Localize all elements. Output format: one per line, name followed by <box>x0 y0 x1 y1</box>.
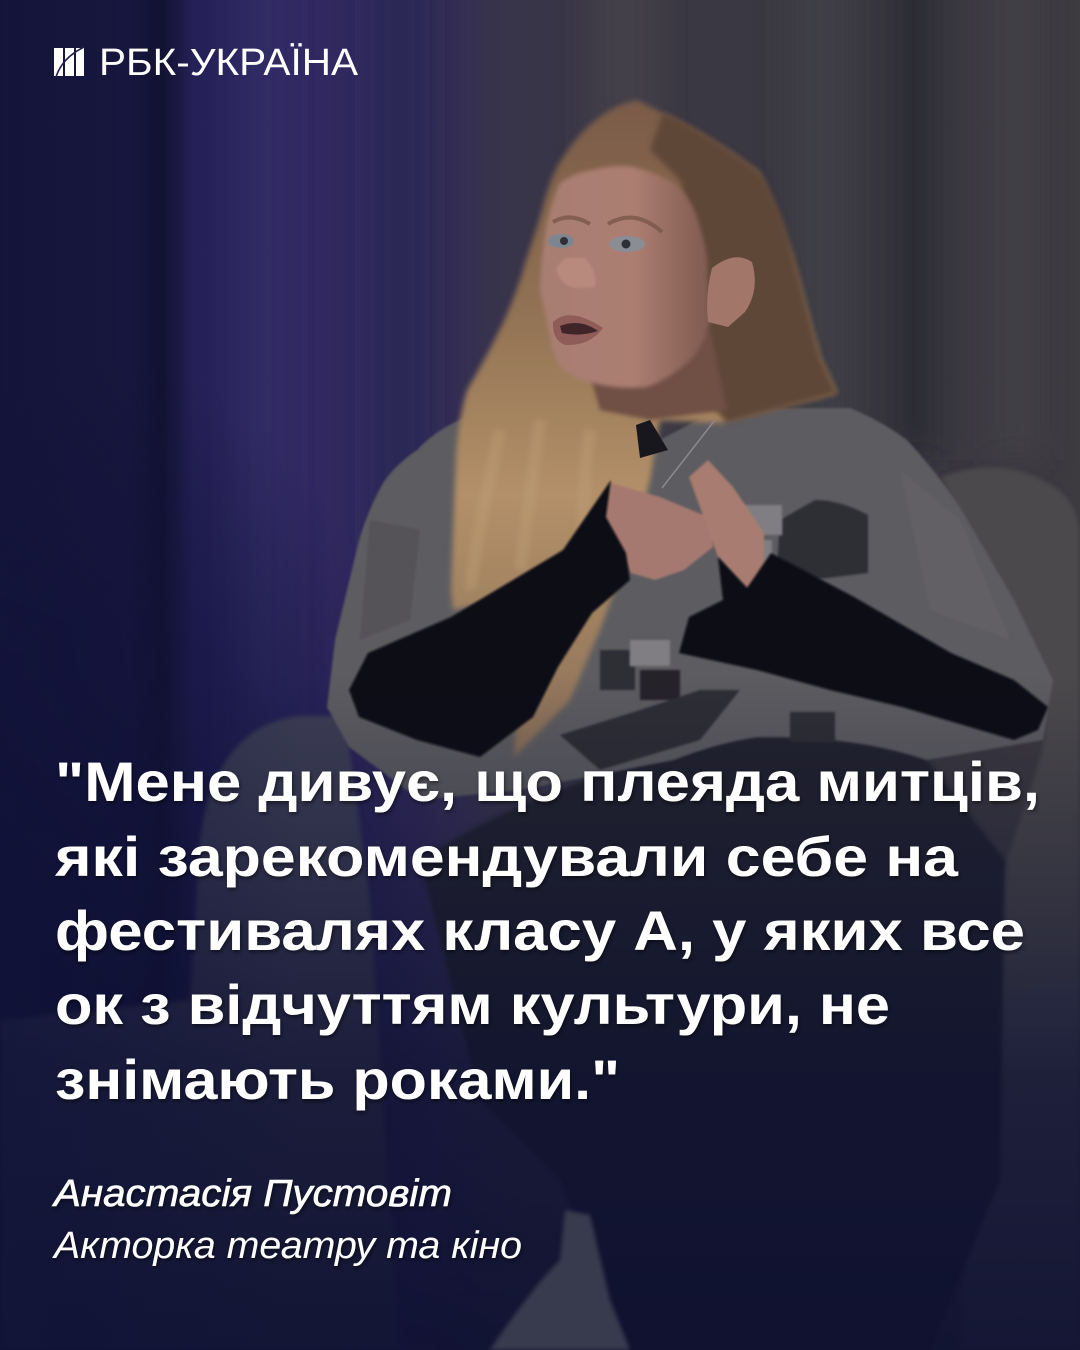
photo: black sleeves <box>349 480 1048 757</box>
quote: знімають роками." <box>55 1048 620 1111</box>
attribution <box>52 1173 522 1267</box>
mouth <box>553 315 603 345</box>
darker hair on the right <box>650 113 837 423</box>
photo: trousers <box>420 737 1005 1350</box>
photo: microphone and necklace <box>636 420 715 488</box>
ear <box>707 257 755 327</box>
photo: blond hair <box>451 100 837 757</box>
quote: фестивалях класу А, у яких все <box>55 899 1025 962</box>
speaker role: Акторка театру та кіно <box>52 1225 522 1267</box>
nose <box>556 258 596 288</box>
quote: ок з відчуттям культури, не <box>55 973 890 1036</box>
photo: neck <box>590 330 727 420</box>
brows and eyes <box>553 217 662 232</box>
photo: sneaker <box>490 1210 630 1350</box>
photo: face <box>540 166 755 388</box>
photo: hands <box>606 460 764 588</box>
speaker name: Анастасія Пустовіт <box>52 1173 452 1215</box>
quote <box>54 750 1040 1111</box>
logo icon <box>54 47 84 77</box>
logo <box>54 42 359 84</box>
quote: які зарекомендували себе на <box>54 825 959 888</box>
logo wordmark: РБК-УКРАЇНА <box>99 42 359 84</box>
quote: "Мене дивує, що плеяда митців, <box>55 750 1040 813</box>
photo: armchair <box>0 467 1080 1350</box>
photo: sweatshirt print <box>560 500 868 770</box>
photo: sweatshirt <box>327 408 1053 800</box>
